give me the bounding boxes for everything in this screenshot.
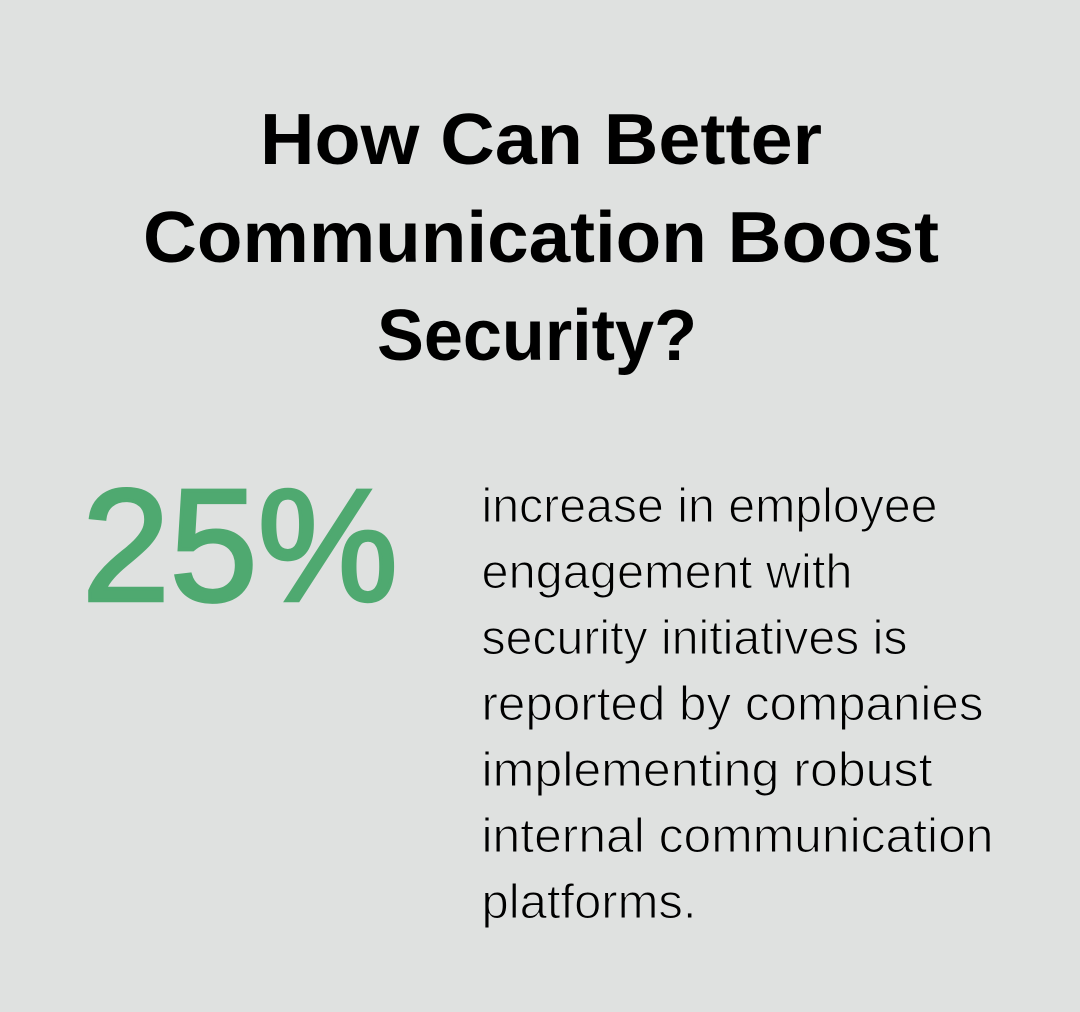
title: How Can Better: [260, 100, 822, 180]
description text: reported by companies: [482, 678, 984, 731]
statistic: 25%: 25%: [82, 456, 398, 634]
description text: platforms.: [482, 876, 696, 929]
title: Security?: [377, 296, 697, 376]
description text: increase in employee: [482, 480, 938, 533]
description text: engagement with: [482, 546, 852, 599]
description text: implementing robust: [482, 744, 932, 797]
description text: [482, 480, 994, 929]
title: [143, 100, 939, 376]
description text: security initiatives is: [482, 612, 908, 665]
title: Communication Boost: [143, 198, 939, 278]
description text: internal communication: [482, 810, 994, 863]
